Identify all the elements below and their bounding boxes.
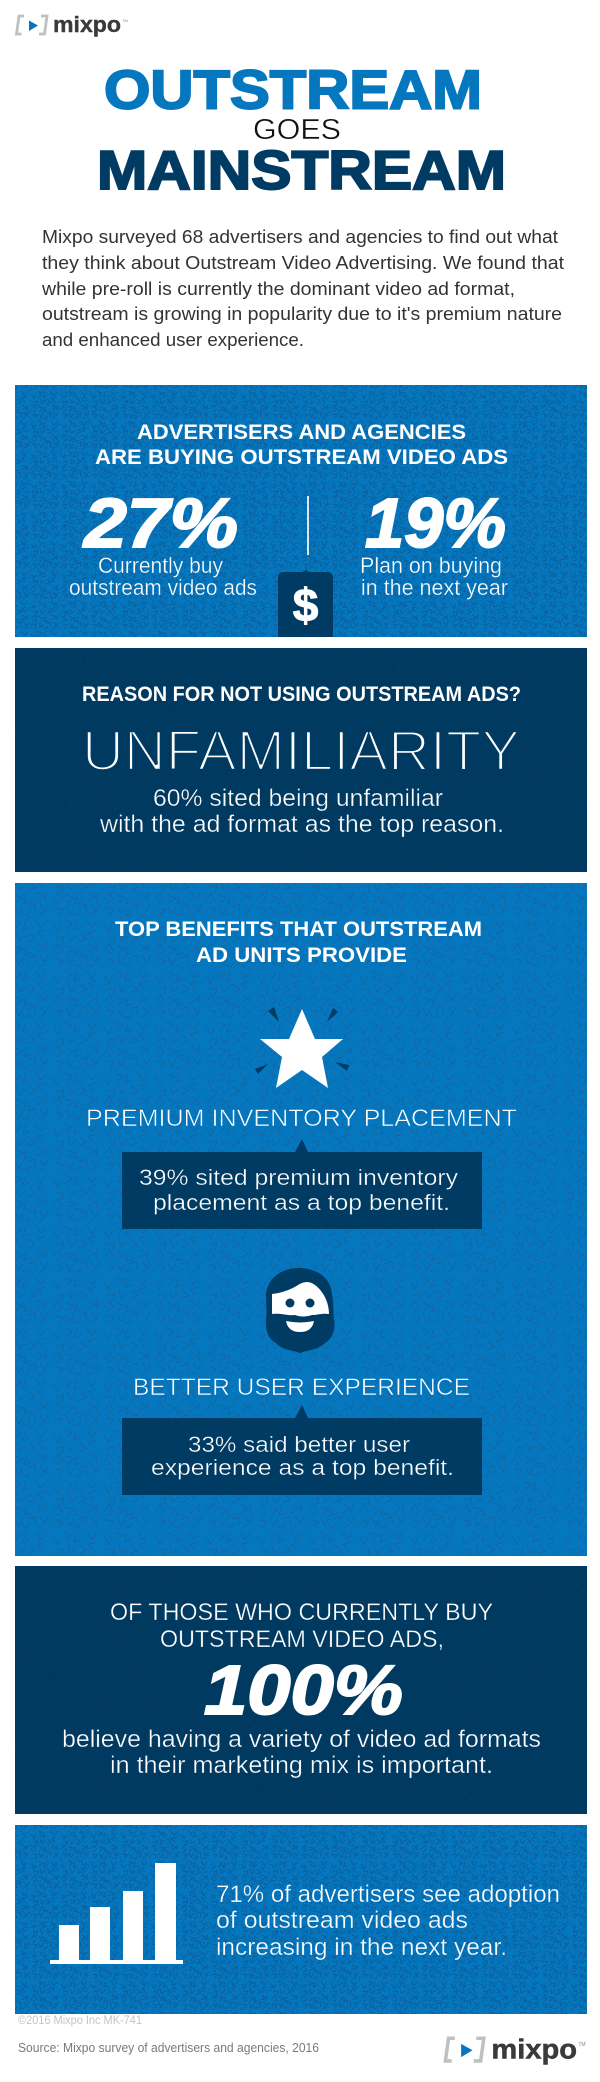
label: better user experience: BETTER USER EXPERIENCE: [133, 1374, 470, 1401]
stat: 27 percent: [69, 484, 257, 600]
intro text: outstream is growing in popularity due to it's premium nature: [42, 304, 562, 324]
panel: reason for not using: [15, 648, 587, 872]
icon: dollar tag: $: [293, 579, 318, 631]
panel: top benefits: [15, 883, 587, 1556]
callout: 39 percent: placement as a top benefit.: [153, 1190, 450, 1215]
text: 60 percent: with the ad format as the top reason.: [99, 811, 504, 838]
callout: 39 percent: 39% sited premium inventory: [139, 1165, 458, 1190]
chart: rising bars icon: [50, 1863, 183, 1964]
heading: top benefits: [115, 918, 482, 967]
title: MAINSTREAM: [97, 139, 506, 201]
heading: top benefits: TOP BENEFITS THAT OUTSTREAM: [115, 918, 482, 941]
intro text: they think about Outstream Video Advertising. We found that: [42, 253, 564, 273]
heading: buying outstream: ADVERTISERS AND AGENCIES: [137, 421, 466, 444]
intro text: Mixpo surveyed 68 advertisers and agencies to find out what: [42, 227, 558, 247]
source note: Source: Mixpo survey of advertisers and agencies, 2016: [18, 2040, 319, 2055]
logo: mixpo footer: [445, 2033, 586, 2064]
text: of those who currently buy: OUTSTREAM VIDEO ADS,: [160, 1626, 444, 1653]
stat: 19 percent: in the next year: [361, 575, 508, 600]
text: 60 percent: 60% sited being unfamiliar: [153, 785, 443, 812]
text: of those who currently buy: OF THOSE WHO CURRENTLY BUY: [110, 1599, 493, 1626]
logo: mixpo header: [16, 12, 128, 37]
logo: mixpo header: TM: [122, 18, 128, 23]
callout: 39 percent: [122, 1139, 482, 1229]
stat: 19 percent: Plan on buying: [360, 553, 502, 578]
copyright note: ©2016 Mixpo Inc MK-741: [18, 2015, 142, 2027]
panel: advertisers and agencies are buying: [15, 385, 587, 637]
heading: buying outstream: ARE BUYING OUTSTREAM VIDEO ADS: [95, 446, 508, 469]
stat: 27 percent: outstream video ads: [69, 575, 257, 600]
title: [97, 58, 506, 201]
divider: [307, 496, 309, 555]
stat: 100 percent: 100%: [204, 1651, 403, 1729]
icon: dollar tag: [278, 569, 333, 637]
text: variety of formats: [62, 1726, 541, 1779]
intro text: [41, 227, 564, 350]
text: variety of formats: believe having a variety of video ad formats: [62, 1726, 541, 1753]
logo: mixpo header: mixpo: [53, 12, 121, 37]
text: 71 percent: 71% of advertisers see adoption: [216, 1881, 560, 1908]
stat: 19 percent: [360, 484, 508, 600]
label: premium inventory placement: PREMIUM INVENTORY PLACEMENT: [86, 1105, 517, 1132]
title: OUTSTREAM: [104, 58, 482, 120]
text: 71 percent: of outstream video ads: [216, 1907, 468, 1934]
headline: unfamiliarity: UNFAMILIARITY: [82, 719, 520, 783]
icon: star with sparks: [255, 1007, 349, 1088]
text: 60 percent: [99, 785, 504, 838]
icon: bearded face: [266, 1268, 335, 1353]
text: variety of formats: in their marketing mix is important.: [110, 1752, 493, 1779]
panel: those who currently buy: [15, 1566, 587, 1814]
logo: mixpo footer: mixpo: [491, 2033, 577, 2064]
title: GOES: [253, 114, 341, 146]
callout: 33 percent: [122, 1405, 482, 1495]
callout: 33 percent: 33% said better user: [188, 1432, 410, 1457]
callout: 33 percent: experience as a top benefit.: [151, 1455, 454, 1480]
text: 71 percent: increasing in the next year.: [216, 1934, 507, 1961]
text: 71 percent: [216, 1881, 560, 1961]
heading: buying outstream: [95, 421, 508, 469]
heading: reason: REASON FOR NOT USING OUTSTREAM ADS?: [82, 683, 521, 706]
logo: mixpo footer: TM: [578, 2042, 586, 2048]
intro text: and enhanced user experience.: [42, 330, 304, 350]
stat: 27 percent: 27%: [82, 484, 238, 562]
text: of those who currently buy: [110, 1599, 493, 1653]
stat: 27 percent: Currently buy: [98, 553, 223, 578]
stat: 19 percent: 19%: [365, 484, 506, 562]
intro text: while pre-roll is currently the dominant video ad format,: [41, 279, 515, 299]
panel: adoption increasing: [15, 1825, 587, 2014]
heading: top benefits: AD UNITS PROVIDE: [196, 944, 407, 967]
